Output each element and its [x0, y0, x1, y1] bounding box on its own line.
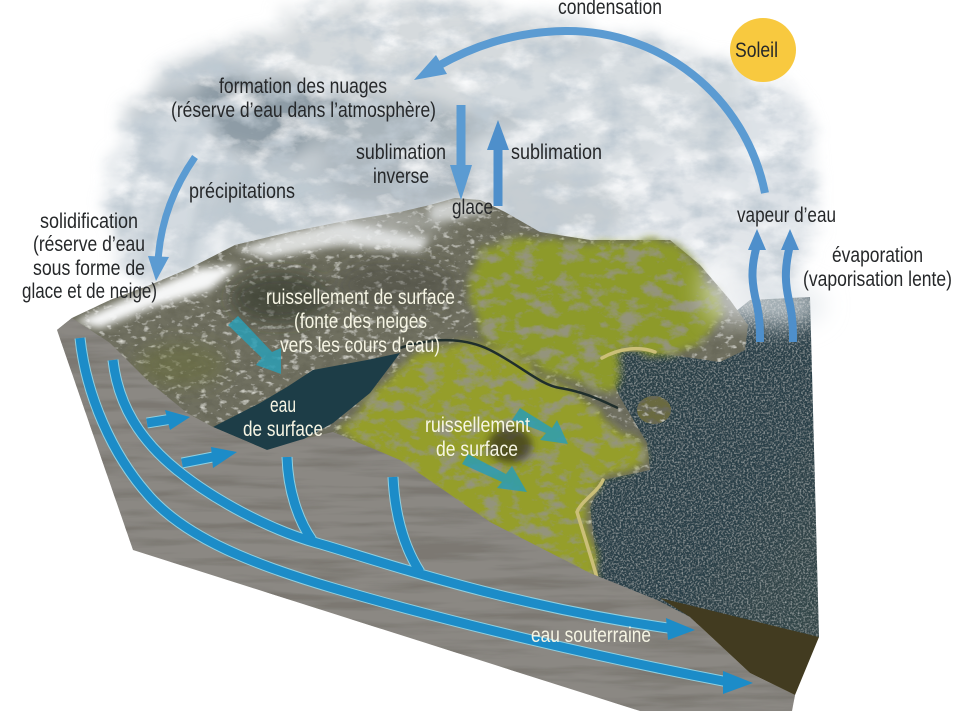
clouds	[108, 2, 815, 305]
label: solidification	[22, 210, 157, 303]
label: cloud formation: formation des nuages	[219, 75, 387, 98]
label: sublimation: sublimation	[511, 141, 602, 164]
label: cloud formation	[171, 75, 436, 122]
river	[400, 340, 618, 408]
label: inverse sublimation: inverse	[373, 165, 429, 188]
dark hollow on hill	[488, 427, 532, 463]
label: surface runoff: ruissellement	[425, 414, 530, 437]
groundwater arrows	[80, 338, 753, 694]
sublimation arrow	[487, 120, 509, 206]
label: inverse sublimation	[356, 141, 446, 188]
label: ice: glace	[452, 196, 493, 219]
mist over mountain tops and sea	[310, 208, 825, 327]
dark rock shadows	[135, 259, 455, 387]
runoff arrows	[228, 316, 568, 492]
label: Soleil: Soleil	[735, 39, 778, 62]
label: inverse sublimation: sublimation	[356, 141, 446, 164]
lake	[213, 353, 400, 450]
snow on ridges	[75, 198, 490, 328]
label: snowmelt runoff: vers les cours d’eau)	[280, 334, 440, 357]
mountains and rocky terrain	[57, 198, 748, 590]
label: evaporation: (vaporisation lente)	[803, 268, 952, 291]
precipitation arrow	[148, 157, 195, 281]
label: snowmelt runoff: (fonte des neiges	[294, 310, 427, 333]
condensation arrow	[414, 31, 765, 193]
label: water vapour: vapeur d’eau	[737, 204, 836, 227]
label: surface water: eau	[270, 394, 296, 417]
label: solidification: (réserve d’eau	[33, 233, 145, 256]
beaches	[577, 349, 655, 578]
deposition arrow	[450, 105, 472, 200]
islet	[637, 396, 671, 424]
rain streaks	[118, 130, 250, 275]
sun	[730, 18, 796, 82]
label: precipitation: précipitations	[189, 180, 295, 203]
upper green slopes	[470, 238, 725, 395]
evaporation arrows	[748, 229, 799, 342]
label: solidification: glace et de neige)	[22, 280, 157, 303]
label: solidification: solidification	[40, 210, 138, 233]
sea bed section	[660, 598, 819, 695]
label: groundwater: eau souterraine	[531, 624, 651, 647]
label: surface runoff	[425, 414, 530, 461]
label: snowmelt runoff	[266, 286, 455, 357]
lower green hill	[335, 345, 648, 585]
ground cross-section	[57, 318, 795, 711]
label: evaporation	[803, 244, 952, 291]
label: surface runoff: de surface	[436, 438, 518, 461]
label: solidification: sous forme de	[33, 257, 145, 280]
label: evaporation: évaporation	[832, 244, 923, 267]
label: snowmelt runoff: ruissellement de surface	[266, 286, 455, 309]
sea	[570, 297, 819, 637]
label: surface water: de surface	[243, 418, 323, 441]
label: cloud formation: (réserve d’eau dans l’atmosphère)	[171, 99, 436, 122]
label: surface water	[243, 394, 323, 441]
